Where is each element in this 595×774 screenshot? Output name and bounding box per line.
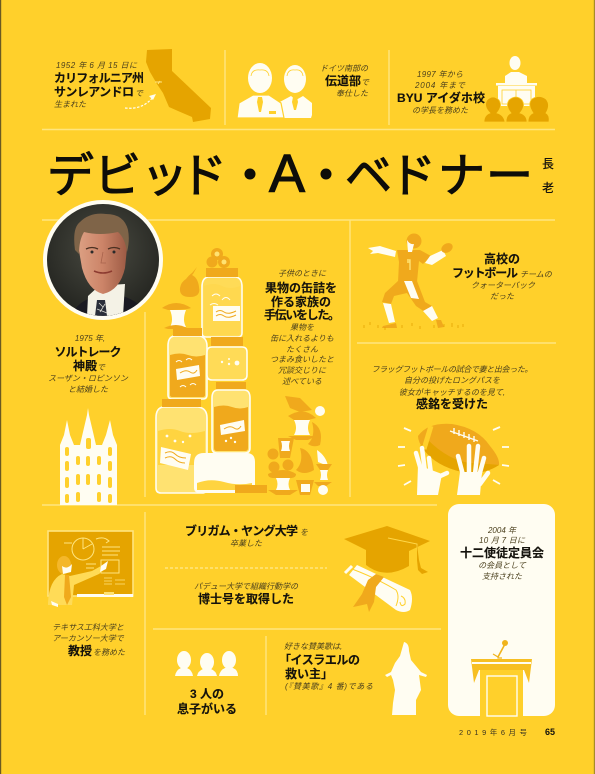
text: temple marriage: と結婚した bbox=[68, 385, 109, 394]
text: temple marriage: スーザン・ロビンソン bbox=[48, 374, 129, 383]
text: BYU graduate: 卒業した bbox=[230, 539, 263, 548]
title honorific bbox=[542, 157, 554, 195]
text: high school football: 高校の bbox=[484, 251, 520, 266]
text: BYU graduate: を bbox=[300, 528, 308, 537]
jar 4 bbox=[212, 382, 250, 453]
text: canning fruit bbox=[264, 269, 340, 386]
text: BYU Idaho details bbox=[397, 70, 485, 115]
text: BYU graduate: ブリガム・ヤング大学 bbox=[185, 523, 298, 538]
text: apostle sustained: 2004 年 bbox=[487, 526, 517, 535]
text: temple marriage: ソルトレーク bbox=[54, 345, 122, 359]
text: mission details: 奉仕した bbox=[336, 89, 369, 98]
icon: two missionaries bbox=[237, 63, 312, 118]
text: professor bbox=[52, 623, 126, 658]
icon: pear bbox=[180, 267, 199, 297]
icon: Christ statue bbox=[385, 642, 427, 715]
text: doctorate bbox=[194, 582, 299, 606]
text: mission details: で bbox=[361, 78, 370, 87]
text: canning fruit: たくさん bbox=[286, 345, 319, 354]
text: birth details: 1952 年 6 月 15 日に bbox=[56, 61, 138, 70]
text: high school football: チームの bbox=[520, 270, 553, 279]
text: BYU Idaho details: 1997 年から bbox=[417, 70, 463, 79]
panel: apostle bbox=[448, 504, 555, 716]
text: flag football bbox=[372, 365, 532, 411]
title honorific: 老 bbox=[542, 181, 554, 195]
panel: BYU Idaho bbox=[397, 56, 549, 122]
icon: Salt Lake temple bbox=[60, 408, 117, 505]
text: favorite hymn: 好きな賛美歌は, bbox=[284, 642, 342, 651]
text: favorite hymn: 救い主」 bbox=[285, 666, 333, 681]
text: favorite hymn: 「イスラエルの bbox=[279, 653, 360, 667]
text: birth details: サンレアンドロ bbox=[54, 85, 134, 99]
title: デビッド・ bbox=[47, 149, 274, 202]
jar 6: flat jar bbox=[194, 453, 267, 493]
text: apostle sustained bbox=[460, 526, 544, 581]
text: high school football: フットボール bbox=[452, 266, 518, 280]
panel: birthplace bbox=[54, 49, 211, 122]
text: birth details: 生まれた bbox=[54, 100, 87, 109]
text: flag football: 自分の投げたロングパスを bbox=[404, 376, 500, 385]
text: doctorate: パデュー大学で組織行動学の bbox=[194, 582, 299, 591]
temple windows bbox=[65, 438, 112, 503]
panel: mission bbox=[237, 63, 370, 118]
text: BYU Idaho details: 2004 年まで bbox=[414, 81, 466, 90]
title honorific: 長 bbox=[542, 157, 554, 171]
text: canning fruit: 果物を bbox=[290, 323, 314, 332]
text: mission details bbox=[320, 64, 370, 98]
text: birth details: カリフォルニア州 bbox=[54, 71, 144, 85]
text: temple marriage: で bbox=[97, 363, 106, 372]
text: professor: を務めた bbox=[93, 648, 126, 657]
text: flag football: 彼女がキャッチするのを見て, bbox=[399, 388, 505, 397]
icon: speaker and audience bbox=[484, 56, 549, 122]
text: birth details bbox=[54, 61, 144, 109]
text: birth details: で bbox=[135, 89, 144, 98]
text: flag football: 感銘を受けた bbox=[416, 396, 488, 411]
icon: pulpit and microphone bbox=[471, 640, 532, 716]
title: A bbox=[269, 144, 305, 204]
text: BYU Idaho details: の学長を務めた bbox=[412, 106, 469, 115]
text: professor: アーカンソー大学で bbox=[52, 634, 125, 643]
icon: three sons bbox=[175, 651, 238, 676]
jar 2 bbox=[168, 328, 207, 399]
icon: football in hands bbox=[398, 424, 509, 495]
text: three sons: 3 人の bbox=[190, 687, 224, 701]
text: three sons: 息子がいる bbox=[177, 701, 237, 716]
text: mission details: 伝道部 bbox=[325, 73, 361, 88]
title: ・ベドナー bbox=[302, 149, 533, 202]
text: temple marriage: 神殿 bbox=[73, 358, 97, 373]
icon: apple core bbox=[162, 303, 191, 329]
text: mission details: ドイツ南部の bbox=[320, 64, 369, 73]
text: apostle sustained: 十二使徒定員会 bbox=[460, 545, 544, 560]
text: professor: 教授 bbox=[68, 643, 92, 658]
text: apostle sustained: 10 月 7 日に bbox=[479, 536, 526, 545]
text: canning fruit: 作る家族の bbox=[271, 294, 331, 309]
text: canning fruit: 冗談交じりに bbox=[278, 366, 327, 375]
text: favorite hymn: (『賛美歌』4 番)である bbox=[285, 682, 373, 691]
text: temple marriage: 1975 年, bbox=[75, 334, 105, 343]
text: flag football: フラッグフットボールの試合で妻と出会った。 bbox=[372, 365, 532, 374]
illustration: jars of fruit bbox=[156, 248, 332, 495]
footer: issue date: 2019年6月号 bbox=[459, 728, 531, 737]
text: canning fruit: 述べている bbox=[282, 377, 322, 386]
jar 5 bbox=[156, 399, 207, 493]
text: high school football: クォーターバック bbox=[471, 281, 536, 290]
text: doctorate: 博士号を取得した bbox=[198, 591, 294, 606]
jar 1 bbox=[202, 268, 242, 337]
icon: berries on top of jar bbox=[206, 248, 230, 268]
icon: teacher at chalkboard bbox=[48, 531, 133, 607]
text: apostle sustained: 支持された bbox=[482, 572, 523, 581]
jar 3 bbox=[207, 337, 247, 380]
text: BYU graduate bbox=[185, 523, 308, 548]
icon: graduation cap and diploma bbox=[344, 526, 430, 612]
portrait photo bbox=[43, 200, 163, 320]
text: apostle sustained: の会員として bbox=[478, 561, 527, 570]
icon: pile of apple cores bbox=[268, 396, 332, 495]
text: canning fruit: つまみ食いしたと bbox=[270, 355, 334, 364]
text: canning fruit: 缶に入れるよりも bbox=[270, 334, 334, 343]
text: three sons bbox=[177, 687, 237, 716]
text: high school football: だった bbox=[490, 292, 515, 301]
footer: page number: 65 bbox=[545, 727, 555, 737]
text: favorite hymn bbox=[279, 642, 373, 691]
text: canning fruit: 手伝いをした。 bbox=[264, 307, 340, 322]
icon: California map bbox=[125, 49, 211, 122]
text: high school football bbox=[452, 251, 553, 301]
icon: quarterback bbox=[364, 234, 463, 330]
text: canning fruit: 果物の缶詰を bbox=[265, 280, 337, 295]
text: professor: テキサス工科大学と bbox=[52, 623, 124, 632]
text: BYU Idaho details: BYU アイダホ校 bbox=[397, 90, 485, 105]
text: temple marriage bbox=[48, 334, 129, 394]
text: canning fruit: 子供のときに bbox=[278, 269, 327, 278]
